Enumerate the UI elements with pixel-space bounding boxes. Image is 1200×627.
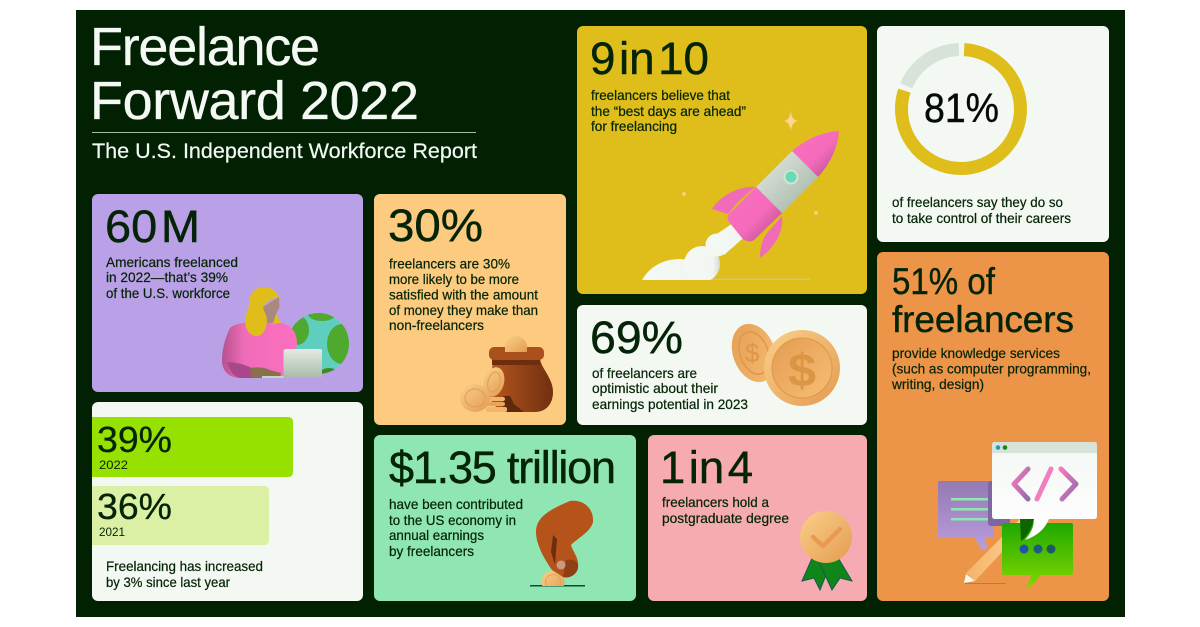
panel: 1 in 4 (648, 435, 867, 601)
text: 9 in 10 description: freelancers believe that (591, 87, 730, 103)
panel: 60 million (92, 194, 363, 392)
text: 1 in 4 description: postgraduate degree (662, 510, 789, 526)
bar: 2021 (92, 486, 269, 545)
text: 1 in 4 description: freelancers hold a (662, 494, 769, 510)
text: 81% description (892, 194, 1071, 226)
text: 81% description: of freelancers say they do so (892, 194, 1063, 210)
text: 81% description: to take control of their careers (892, 210, 1071, 226)
panel: 69 percent (577, 305, 867, 425)
text: 30% description: more likely to be more (389, 271, 519, 287)
icon: gold coins: $ (788, 344, 816, 396)
title (90, 17, 419, 131)
stat: 60 M: 60 M (105, 201, 200, 252)
text: 60M description: of the U.S. workforce (106, 285, 230, 301)
stat: 1 in 4: 1 in 4 (660, 442, 753, 493)
bar: 2022: 2022 (99, 458, 128, 472)
title block (90, 17, 477, 163)
text: 9 in 10 description: for freelancing (591, 118, 677, 134)
text: 60M description: in 2022—that’s 39% (106, 269, 228, 285)
text: 51% description: provide knowledge services (892, 345, 1060, 361)
icon: gold coins (724, 318, 840, 406)
text: 51% description: writing, design) (891, 376, 984, 392)
text: 51% description: (such as computer programming, (892, 360, 1091, 376)
stat: $1.35 trillion: $1.35 trillion (389, 442, 616, 493)
text: 69% description: optimistic about their (592, 380, 718, 396)
bar: 2021: 36% (97, 486, 172, 527)
bar: 2022 (92, 417, 293, 477)
icon: rocket (642, 110, 839, 282)
panel: 81 percent donut (877, 26, 1109, 242)
title: Forward 2022 (90, 71, 419, 131)
panel: 51 percent knowledge services (877, 252, 1109, 601)
text: 69% description (592, 365, 748, 412)
stat: 51% of freelancers (892, 261, 1074, 340)
text: trillion description: to the US economy in (389, 512, 516, 528)
stat: 9 in 10: 9 in 10 (590, 33, 709, 84)
stat: 69%: 69% (590, 312, 683, 363)
text: increase note: by 3% since last year (106, 574, 230, 590)
panel: 1.35 trillion (374, 435, 636, 601)
panel: year over year bars (92, 402, 363, 601)
icon: medal with check (800, 511, 852, 590)
text: trillion description: have been contributed (389, 496, 523, 512)
icon: woman with laptop and globe (222, 286, 349, 378)
bar: 2021: 2021 (99, 525, 125, 539)
text: trillion description: by freelancers (389, 543, 474, 559)
icon: code window, speech bubbles and pencil (938, 442, 1097, 589)
text: 30% description: non-freelancers (389, 317, 484, 333)
stat: 81%: 81% (924, 85, 999, 131)
icon: hand dropping coin (530, 501, 593, 594)
text: 60M description (106, 254, 238, 301)
subtitle: The U.S. Independent Workforce Report (92, 140, 477, 163)
text: 69% description: of freelancers are (592, 365, 697, 381)
icon: money pot with coins (460, 336, 553, 412)
text: 1 in 4 description (662, 494, 789, 526)
text: 30% description: satisfied with the amount (389, 286, 538, 302)
bar: 2022: 39% (97, 419, 172, 460)
text: 30% description (389, 256, 538, 333)
panel: 9 in 10 (577, 26, 867, 294)
text: 30% description: freelancers are 30% (389, 256, 510, 272)
chart: donut 81% (901, 50, 1020, 169)
stat: 51% of freelancers: 51% of (892, 261, 996, 302)
text: increase note: Freelancing has increased (106, 558, 263, 574)
text: trillion description: annual earnings (389, 527, 484, 543)
title: Freelance (90, 17, 320, 77)
icon: gold coins: $ (745, 338, 760, 368)
text: 30% description: of money they make than (389, 302, 538, 318)
stat: 30%: 30% (388, 200, 483, 251)
panel: 30 percent satisfaction (374, 194, 566, 425)
text: 9 in 10 description (591, 87, 746, 134)
text: 60M description: Americans freelanced (106, 254, 238, 270)
text: trillion description (389, 496, 523, 559)
text: 69% description: earnings potential in 2023 (592, 396, 748, 412)
text: 9 in 10 description: the “best days are ahead” (591, 103, 746, 119)
text: 51% description (891, 345, 1091, 392)
stat: 51% of freelancers: freelancers (892, 299, 1074, 340)
text: increase note (106, 558, 263, 590)
